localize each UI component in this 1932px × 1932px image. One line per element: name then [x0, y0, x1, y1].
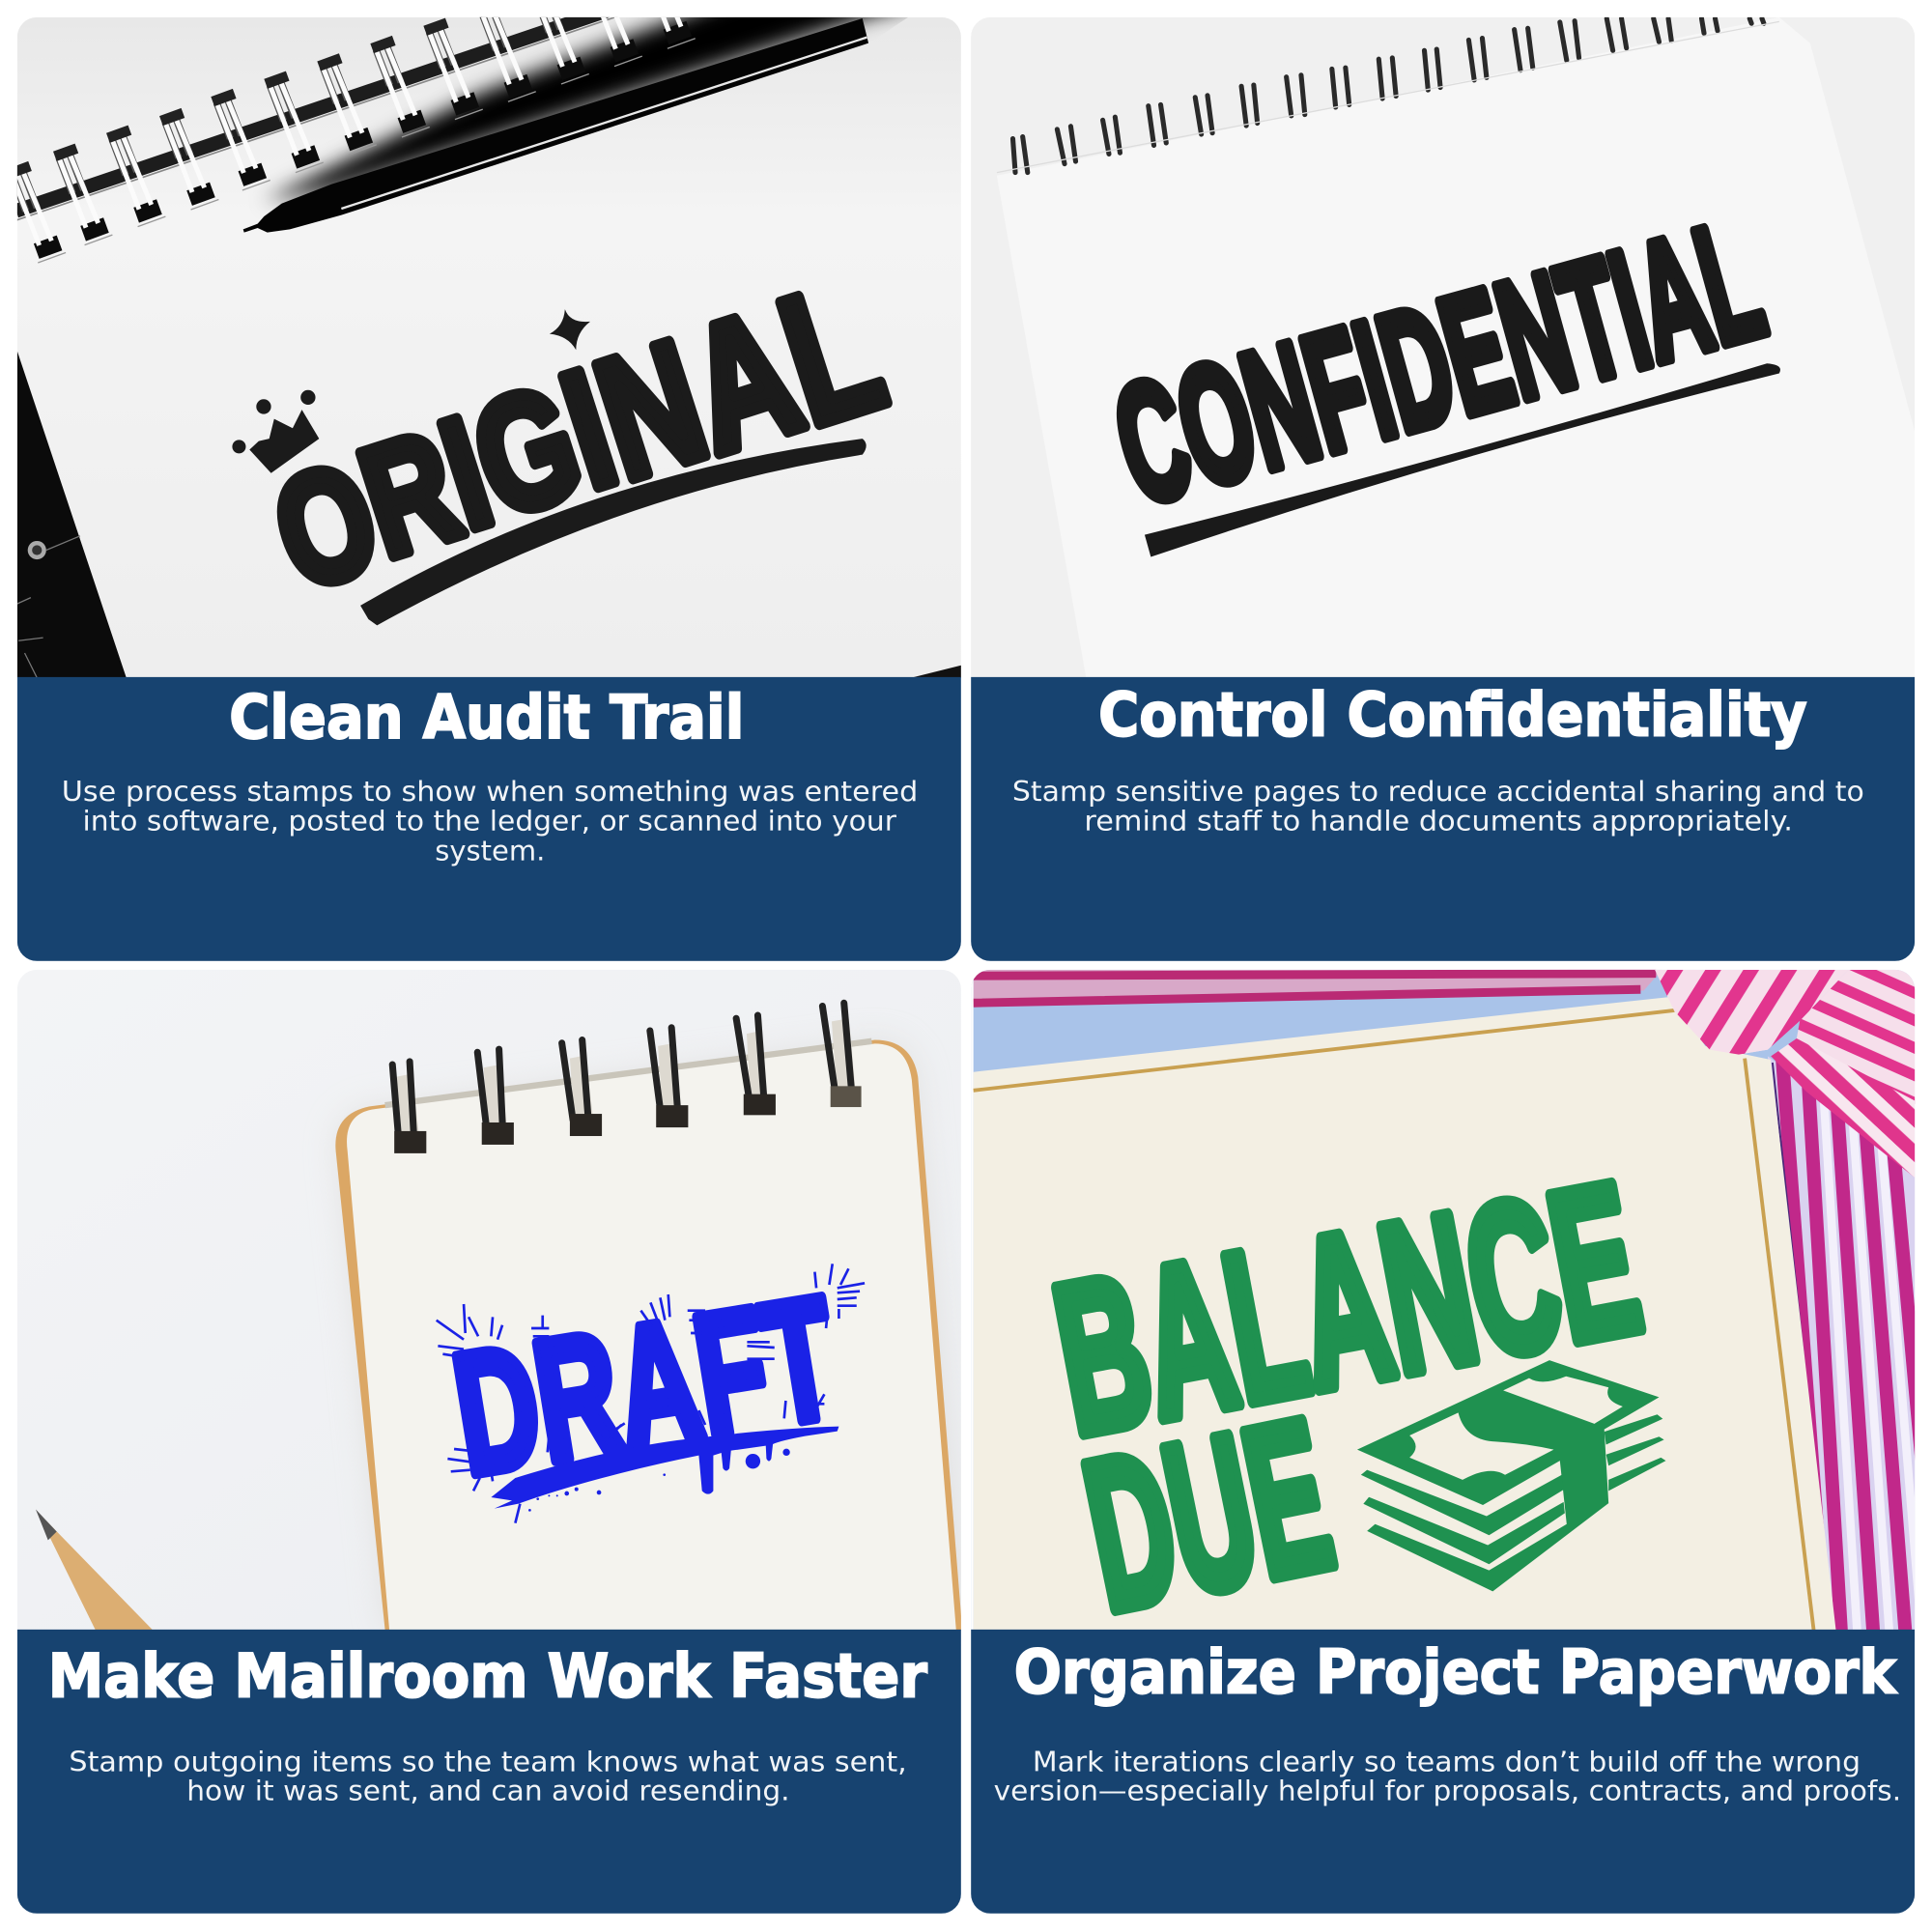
stamp word: ORIGINAL: G: [454, 352, 600, 552]
body text: system.: [435, 834, 545, 867]
photo: small notepad with DRAFT stamp: [17, 970, 967, 1631]
stamp word: ORIGINAL: O: [255, 429, 397, 624]
stamp underline: [360, 439, 867, 625]
body text: Stamp outgoing items so the team knows what was sent,: [69, 1746, 907, 1778]
caption bar: [971, 1630, 1915, 1914]
body text: [71, 1750, 904, 1806]
body text: Mark iterations clearly so teams don’t build off the wrong: [1033, 1746, 1861, 1778]
panel: clean audit trail: [7, 0, 961, 961]
stamp word: ORIGINAL: R: [342, 398, 477, 590]
stamp word: ORIGINAL: A: [667, 271, 821, 492]
heading: Control Confidentiality: [1098, 679, 1807, 750]
caption bar: [971, 677, 1915, 961]
stamp word: ORIGINAL: I: [423, 384, 509, 562]
photo: card with ribbon and BALANCE DUE stamp: [971, 970, 1932, 1655]
pencil: [36, 1509, 153, 1631]
stamp word: ORIGINAL: N: [577, 303, 725, 516]
body text: [1014, 781, 1862, 837]
panel: make mailroom work faster: [17, 970, 967, 1914]
spiral binding and pen: [7, 0, 934, 264]
photo: notebook with ORIGINAL stamp: [7, 0, 961, 678]
panel: control confidentiality: [971, 17, 1915, 961]
caption bar: [17, 677, 961, 961]
caption bar: [17, 1630, 961, 1914]
body text: into software, posted to the ledger, or scanned into your: [82, 805, 896, 838]
stamp underline: [1145, 363, 1780, 557]
heading: Make Mailroom Work Faster: [48, 1640, 927, 1711]
ribbon and bow: [1655, 970, 1932, 1642]
body text: how it was sent, and can avoid resending.: [186, 1775, 790, 1807]
panel: organize project paperwork: [971, 970, 1932, 1914]
heading: Clean Audit Trail: [229, 682, 744, 753]
photo: spiral pad with CONFIDENTIAL stamp: [971, 17, 1915, 678]
icon: crown: [232, 390, 319, 473]
icon: stack of cash: [1357, 1360, 1665, 1591]
body text: [995, 1750, 1898, 1806]
stamp word: DRAFT: DRAFT: [442, 1260, 849, 1511]
stamp brush marks and underline: [437, 1264, 865, 1523]
body text: [62, 775, 918, 867]
body text: remind staff to handle documents appropriately.: [1084, 805, 1793, 838]
stamp word: DUE: DUE: [1068, 1375, 1348, 1655]
body text: Use process stamps to show when something was entered: [62, 775, 918, 808]
body text: version—especially helpful for proposals, contracts, and proofs.: [994, 1775, 1901, 1807]
stamp word: ORIGINAL: L: [759, 242, 904, 465]
stamp word: ORIGINAL: I: [543, 334, 634, 524]
body text: Stamp sensitive pages to reduce accidental sharing and to: [1012, 775, 1864, 808]
icon: sparkle: [550, 309, 590, 350]
bow knot overlay: [1655, 970, 1848, 1055]
